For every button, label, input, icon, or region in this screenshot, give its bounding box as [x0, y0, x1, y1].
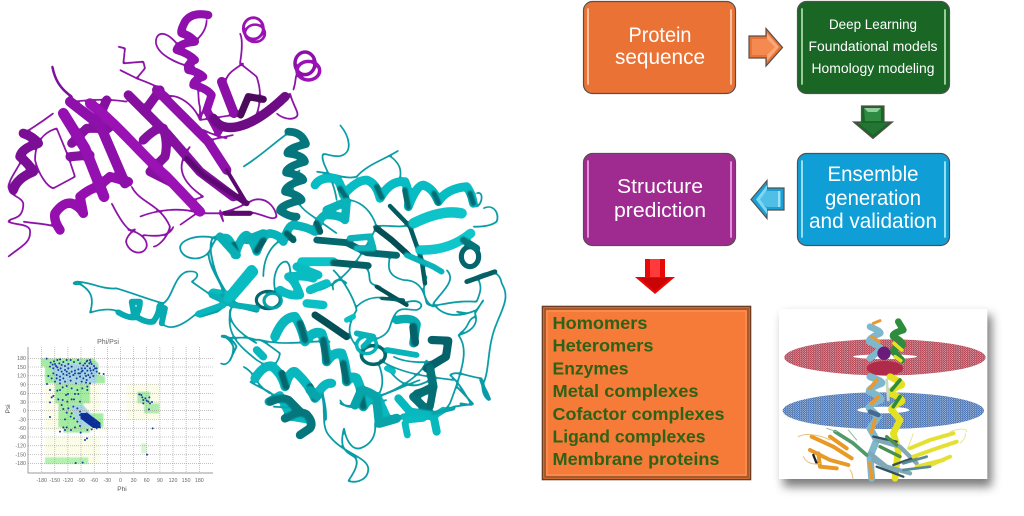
- list box: applications: Enzymes: [552, 358, 629, 378]
- y axis tick labels: 90: [20, 382, 26, 388]
- teal dark helix: [280, 132, 306, 217]
- y axis tick labels: [15, 356, 26, 467]
- protein structure: purple chain: [8, 14, 320, 257]
- box: Deep Learning, Foundational models, Homology modeling: Homology modeling: [812, 61, 934, 76]
- box: Ensemble generation and validation: generation: [825, 187, 921, 210]
- list box: applications: Metal complexes: [552, 381, 699, 401]
- x axis tick labels: 180: [195, 478, 204, 484]
- x axis tick labels: 0: [119, 478, 122, 484]
- box: Ensemble generation and validation: Ensemble: [828, 163, 918, 186]
- y axis tick labels: -60: [18, 426, 26, 432]
- box: Deep Learning, Foundational models, Homology modeling: Foundational models: [808, 39, 938, 54]
- coil helices: [243, 18, 263, 39]
- box: Protein sequence: [584, 2, 736, 94]
- purple loops: [8, 20, 298, 257]
- teal chain: left tail: [73, 233, 263, 360]
- membrane protein panel: [779, 309, 992, 487]
- x axis tick labels: 120: [169, 478, 177, 484]
- list box: applications: Ligand complexes: [552, 426, 706, 446]
- x axis tick labels: -150: [49, 478, 60, 484]
- y axis tick labels: -90: [18, 435, 26, 441]
- panel background: [779, 309, 987, 479]
- y axis tick labels: 0: [23, 408, 26, 414]
- axes: [28, 347, 213, 473]
- data points: [47, 359, 153, 463]
- x axis tick labels: -30: [103, 478, 111, 484]
- arrow: red down: [635, 259, 675, 294]
- list box: applications: Heteromers: [552, 336, 654, 356]
- arrow: orange right: [749, 28, 782, 66]
- helical ribbons: [177, 14, 218, 132]
- box: Structure prediction: [584, 154, 736, 246]
- green and gray central domain: [835, 432, 867, 455]
- x axis tick labels: 60: [144, 478, 150, 484]
- density regions: [41, 358, 160, 464]
- top helix: [315, 178, 473, 207]
- ligand sphere: [877, 347, 891, 360]
- y axis tick labels: -150: [15, 452, 26, 458]
- yellow beta domain: [910, 433, 957, 467]
- list box: applications: Homomers: [552, 313, 648, 333]
- left helix: [223, 202, 347, 255]
- membrane protein drawing: [783, 321, 986, 479]
- plot title: Phi/Psi: [97, 339, 119, 346]
- box: Deep Learning, Foundational models, Homology modeling: Deep Learning: [829, 17, 917, 32]
- x axis tick labels: 150: [182, 478, 191, 484]
- helices: coils and centre: [256, 291, 280, 309]
- x axis tick labels: -120: [63, 478, 73, 484]
- x axis tick labels: -60: [90, 478, 98, 484]
- box: Ensemble generation and validation: and validation: [809, 210, 937, 233]
- y axis tick labels: 150: [17, 365, 26, 371]
- y axis tick labels: 180: [17, 356, 26, 362]
- teal chain: upper body: [200, 125, 506, 420]
- box: Structure prediction: Structure: [617, 176, 703, 198]
- y axis tick labels: -120: [15, 444, 26, 450]
- y axis tick labels: 60: [20, 391, 26, 397]
- panel shadow: [783, 315, 992, 487]
- y axis tick labels: 30: [20, 400, 26, 406]
- y axis tick labels: -30: [18, 417, 26, 423]
- blue membrane disc: [783, 392, 984, 429]
- x axis tick labels: 30: [131, 478, 137, 484]
- teal chain: bottom: [250, 380, 489, 482]
- y axis title: Psi: [5, 404, 12, 414]
- Ramachandran plot: [5, 339, 213, 493]
- box: Deep Learning, Foundational models, Homology modeling: [798, 2, 950, 94]
- arrow: green down: [854, 106, 892, 138]
- list box: applications: Membrane proteins: [552, 449, 720, 469]
- x axis title: Phi: [117, 486, 127, 493]
- box: Ensemble generation and validation: [798, 154, 950, 246]
- box: Protein sequence: sequence: [615, 46, 705, 69]
- beta sheet strands: [63, 113, 104, 197]
- orange beta domain: [810, 437, 852, 468]
- list box: applications: Cofactor complexes: [552, 404, 725, 424]
- x axis tick labels: 90: [157, 478, 163, 484]
- red membrane disc: [784, 339, 986, 375]
- purple tail: [52, 67, 72, 97]
- arrow: blue left: [751, 180, 784, 218]
- protein structure: teal chain: [73, 125, 506, 482]
- x axis tick labels: -90: [77, 478, 85, 484]
- strands: [213, 272, 253, 297]
- transmembrane helices: [869, 327, 880, 358]
- box: Protein sequence: Protein: [628, 24, 692, 47]
- box: Structure prediction: prediction: [614, 200, 706, 222]
- x axis tick labels: -180: [36, 478, 47, 484]
- x axis tick labels: [36, 478, 204, 484]
- y axis tick labels: 120: [17, 374, 26, 380]
- grid lines: [28, 347, 213, 473]
- list box: applications: [542, 306, 750, 480]
- y axis tick labels: -180: [15, 461, 26, 467]
